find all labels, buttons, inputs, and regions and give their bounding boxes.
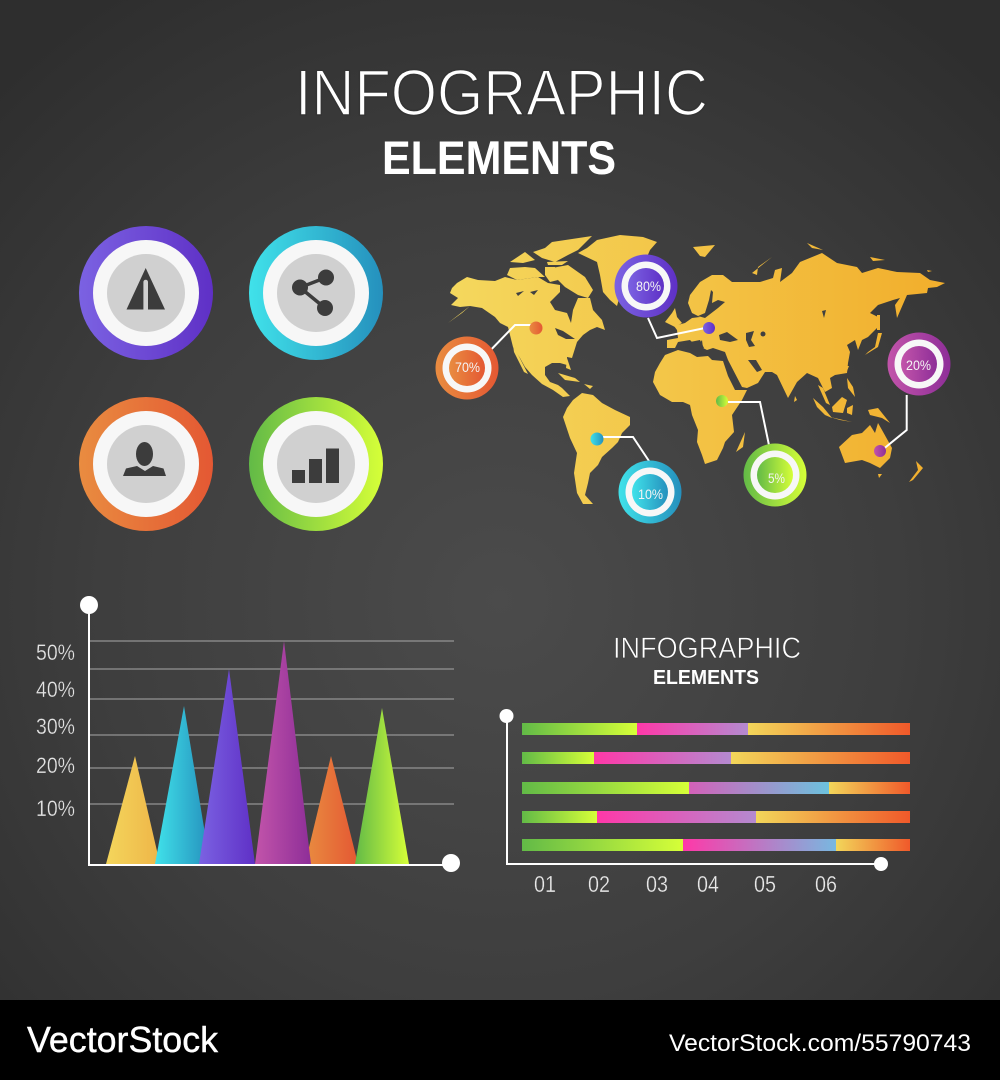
x axis labels: 03 <box>646 871 668 897</box>
callout: 5%: 5% <box>768 471 785 486</box>
callout: 70% <box>436 322 542 400</box>
triangle bars <box>106 641 409 864</box>
callout: 80%: 80% <box>636 279 661 294</box>
icon: road triangle button <box>79 226 213 360</box>
y axis labels: 20% <box>36 753 75 778</box>
world map landmass <box>448 235 945 504</box>
panel: icon buttons <box>79 226 383 531</box>
chart subtitle: INFOGRAPHIC <box>613 632 801 665</box>
map water cut-outs <box>516 290 826 372</box>
panel: world map <box>436 235 950 524</box>
title <box>295 56 708 184</box>
icon: person button <box>79 397 213 531</box>
chart gridlines <box>90 641 454 804</box>
x axis labels: 01 <box>534 871 556 897</box>
callout: 70%: 70% <box>455 360 480 375</box>
callout: 80% <box>614 254 715 338</box>
callout: 5% <box>716 395 806 506</box>
footer bar: VectorStock.com/55790743 <box>669 1030 971 1057</box>
y axis labels <box>36 640 75 821</box>
callout: 20%: 20% <box>906 358 931 373</box>
callout: 20% <box>874 332 950 457</box>
footer bar <box>0 1000 1000 1080</box>
panel: stacked bar chart <box>500 632 910 897</box>
chart axes <box>500 709 888 871</box>
stacked bars <box>522 723 910 851</box>
chart subtitle: ELEMENTS <box>653 667 759 689</box>
chart subtitle <box>613 632 801 689</box>
x axis labels: 05 <box>754 871 776 897</box>
footer bar: VectorStock <box>27 1019 219 1060</box>
y axis labels: 10% <box>36 796 75 821</box>
icon: share button <box>249 226 383 360</box>
panel: triangle chart <box>36 596 460 872</box>
callout: 10% <box>590 432 682 524</box>
callout: 10%: 10% <box>638 487 663 502</box>
icon: bar chart button <box>249 397 383 531</box>
x axis labels: 06 <box>815 871 837 897</box>
title: INFOGRAPHIC <box>295 56 708 129</box>
title: ELEMENTS <box>382 131 616 184</box>
x axis labels: 04 <box>697 871 719 897</box>
chart axes <box>80 596 460 872</box>
x axis labels <box>534 871 837 897</box>
y axis labels: 30% <box>36 714 75 739</box>
x axis labels: 02 <box>588 871 610 897</box>
y axis labels: 40% <box>36 677 75 702</box>
y axis labels: 50% <box>36 640 75 665</box>
